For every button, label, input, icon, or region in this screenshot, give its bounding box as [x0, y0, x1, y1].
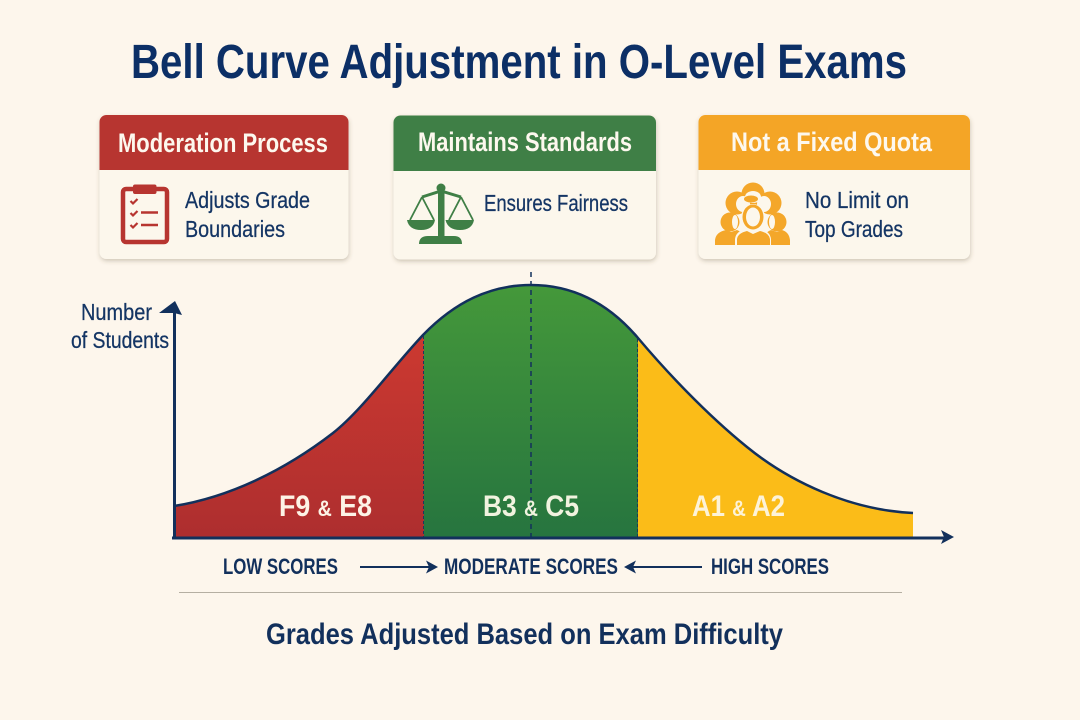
y axis with arrow: [159, 301, 182, 538]
text: adjusts grade boundaries: Boundaries: [185, 216, 285, 242]
arrow: high to moderate: [624, 560, 702, 574]
chart: bell curve: [71, 272, 954, 544]
label: number of students: of Students: [71, 327, 169, 353]
label: moderate scores: MODERATE SCORES: [444, 554, 618, 579]
label: F9 and E8: F9 & E8: [279, 490, 372, 523]
axis labels row: [223, 554, 829, 579]
heading: maintains standards: Maintains Standards: [418, 127, 632, 157]
region: low scores: [176, 336, 424, 536]
label: B3 and C5: B3 & C5: [483, 490, 579, 523]
title: Bell Curve Adjustment in O-Level Exams: [131, 36, 907, 89]
icon: balance scale: [407, 184, 474, 244]
heading: moderation process: Moderation Process: [118, 128, 328, 158]
icon: clipboard checklist: [123, 184, 167, 242]
curve outline: [174, 285, 913, 513]
panel: maintains standards: [394, 116, 656, 260]
label: number of students: Number: [81, 299, 152, 325]
x axis with arrow: [172, 530, 954, 544]
label: A1 and A2: A1 & A2: [692, 490, 785, 523]
panel header: not a fixed quota: [698, 115, 970, 170]
panel header: maintains standards: [394, 116, 656, 171]
panel: moderation process: [100, 115, 348, 259]
text: adjusts grade boundaries: [185, 187, 310, 242]
footer caption: Grades Adjusted Based on Exam Difficulty: [266, 618, 783, 651]
panel header: moderation process: [100, 115, 348, 170]
heading: not a fixed quota: Not a Fixed Quota: [731, 127, 932, 157]
label: high scores: HIGH SCORES: [711, 554, 829, 579]
panel: not a fixed quota: [698, 115, 970, 259]
text: no limit on top grades: No Limit on: [805, 187, 909, 213]
label: low scores: LOW SCORES: [223, 554, 338, 579]
label: number of students: [71, 299, 169, 353]
text: ensures fairness: Ensures Fairness: [484, 190, 628, 216]
region: high scores: [638, 340, 913, 536]
text: no limit on top grades: [805, 187, 909, 242]
text: adjusts grade boundaries: Adjusts Grade: [185, 187, 310, 213]
icon: group of people: [715, 182, 790, 246]
arrow: low to moderate: [360, 560, 438, 574]
text: no limit on top grades: Top Grades: [805, 216, 903, 242]
region: moderate scores: [424, 280, 638, 540]
